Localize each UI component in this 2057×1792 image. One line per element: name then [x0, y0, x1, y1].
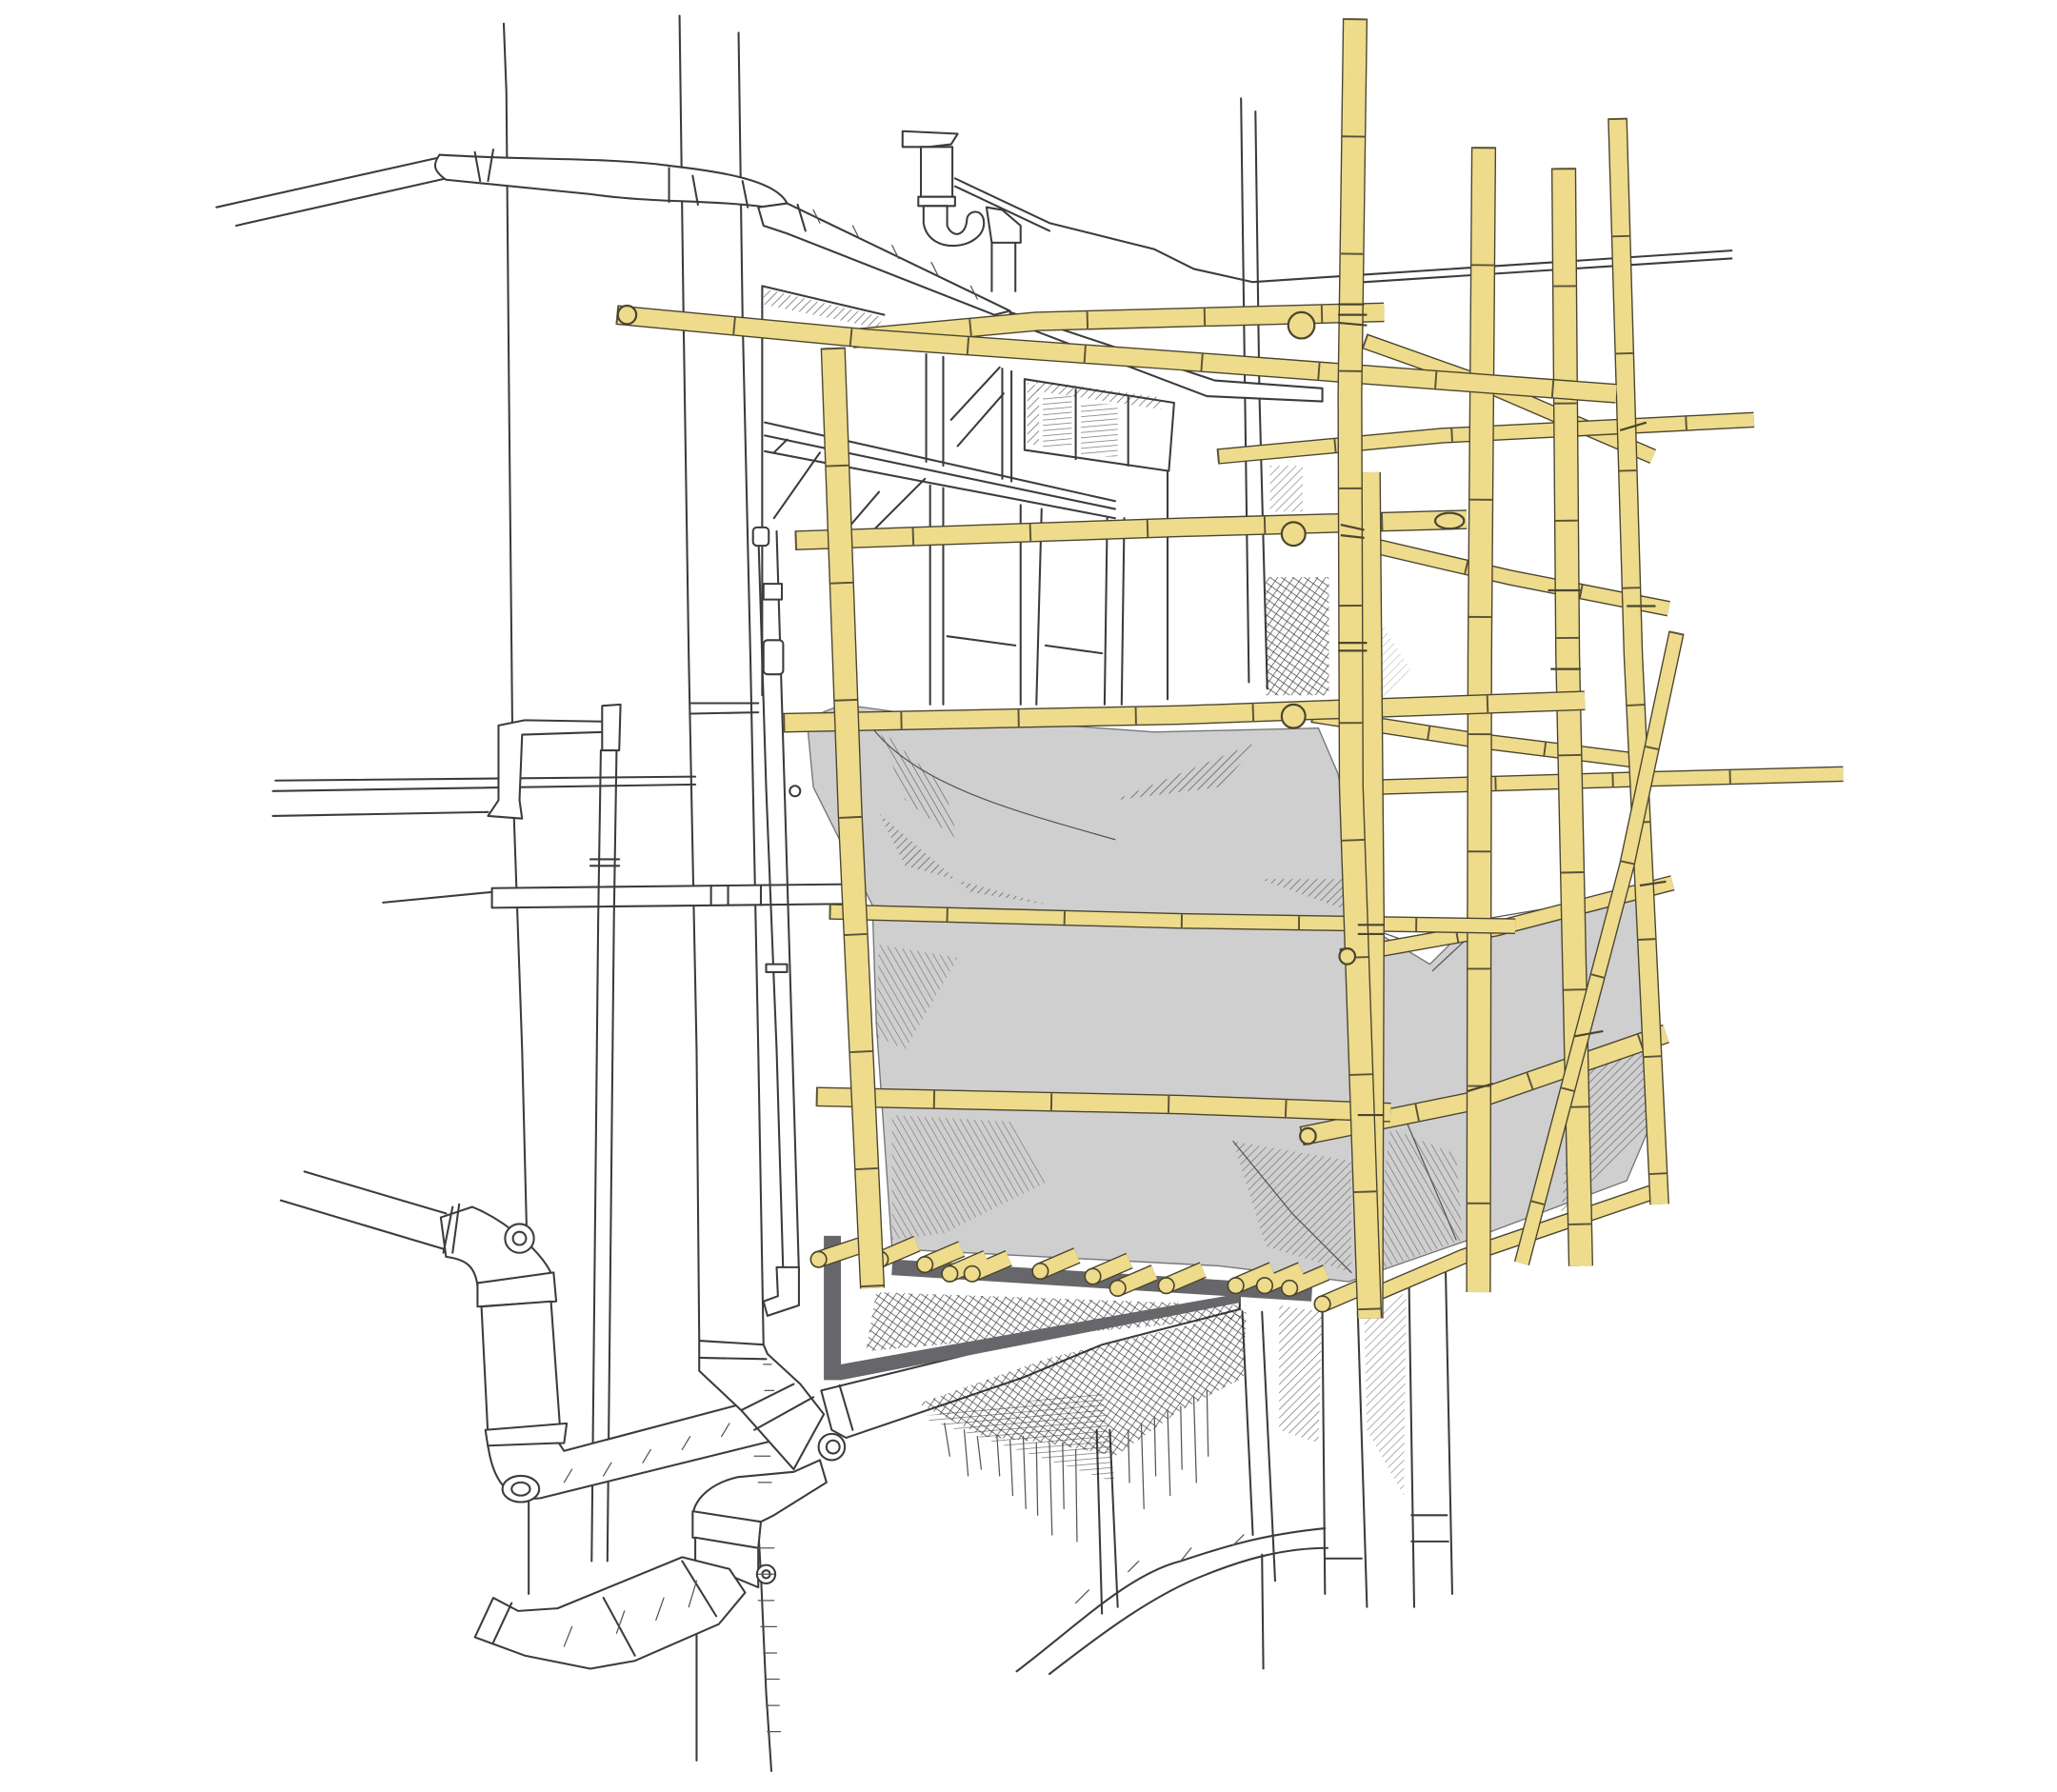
bamboo: second back rail — [1351, 541, 1668, 608]
dark steel bracket — [824, 1236, 1312, 1380]
platform log ends — [810, 1244, 1359, 1312]
conduit with clips — [753, 528, 799, 1316]
window and awning behind the scaffold — [762, 286, 1323, 705]
top left pipe — [216, 149, 1010, 315]
awning hatching — [764, 289, 1161, 456]
shadow hatching beneath the platform — [866, 1292, 1407, 1542]
bamboo: fourth back rail — [1341, 883, 1672, 956]
bamboo: lower diagonal rails and platform rail — [1365, 1191, 1655, 1299]
mid wall pipes and elbow — [273, 703, 847, 1562]
building wall lines — [504, 16, 1452, 1771]
bamboo: fifth back rail — [1302, 1034, 1666, 1136]
bamboo: front right pole — [1350, 18, 1369, 1319]
lower left drain pipes — [281, 1171, 1328, 1674]
grey tarp — [807, 705, 1649, 1282]
bamboo: third horizontal — [783, 701, 1585, 723]
bamboo: back horizontals — [1365, 341, 1653, 456]
wall hatching near the upper right — [1266, 466, 1410, 702]
drain fitting at the top — [903, 131, 1021, 291]
bamboo: third back rail — [1312, 715, 1640, 761]
bamboo: diagonal brace — [1522, 632, 1677, 1264]
bamboo: long right rail — [1377, 774, 1843, 787]
bamboo: front left pole — [833, 348, 872, 1288]
bamboo cut ends and lashings — [618, 305, 1666, 1144]
bamboo: fourth horizontal — [829, 912, 1515, 926]
bamboo: rear pole 2 — [1564, 168, 1581, 1266]
hatching on the pipes — [564, 209, 1244, 1732]
bamboo: front right pole lower — [1368, 472, 1372, 1319]
bamboo: rear pole 3 — [1618, 118, 1660, 1205]
overhead wires — [955, 178, 1731, 284]
bamboo: second horizontal — [795, 520, 1467, 541]
bamboo: front top horizontal — [852, 312, 1384, 338]
bamboo: fifth horizontal — [816, 1097, 1390, 1112]
bamboo: rail to the right at top — [1217, 420, 1754, 456]
tarp fold hatching — [876, 728, 1647, 1272]
bamboo: rear vertical poles — [1478, 147, 1484, 1292]
bamboo: long top rail — [616, 315, 1616, 393]
white gaps and fold lines — [872, 728, 1620, 1272]
